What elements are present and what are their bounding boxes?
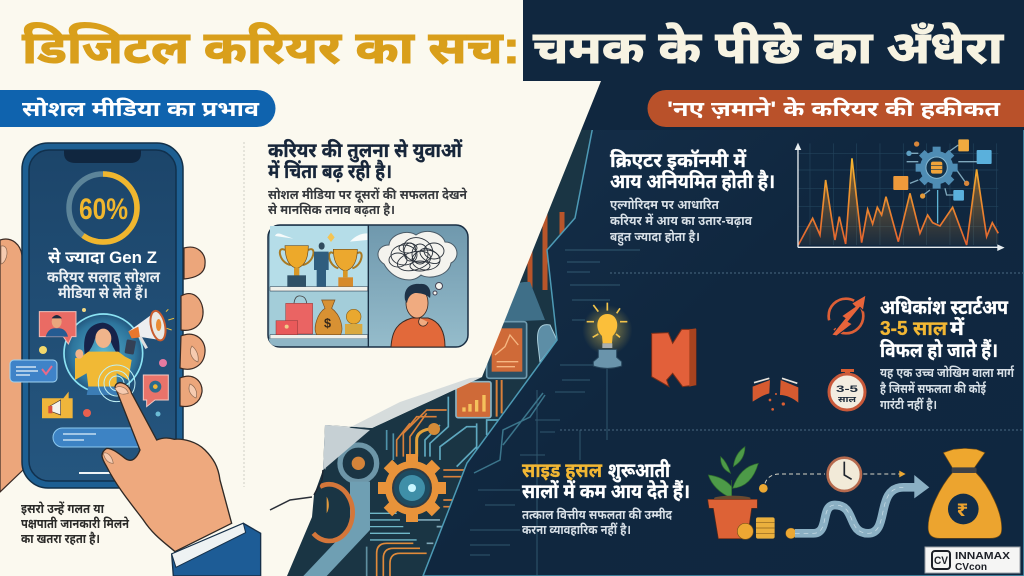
icon: broken orange N block bbox=[652, 328, 696, 387]
circuit: small brass knob bbox=[428, 423, 440, 435]
creator economy heading bbox=[610, 148, 775, 193]
circuit panel revealed behind the torn paper bbox=[280, 80, 610, 576]
icon: sprout in pot with coins bbox=[708, 447, 775, 539]
circuit: central orange gear bbox=[378, 454, 446, 522]
middle body text bbox=[268, 187, 468, 217]
icon: stopwatch with 3-5 years: 3-5 bbox=[836, 384, 858, 394]
icon: broken bridge bbox=[753, 378, 798, 411]
middle body text: सोशल मीडिया पर दूसरों की सफलता देखने bbox=[268, 187, 468, 203]
60% progress ring: 60% bbox=[79, 193, 128, 226]
right hand fingertips bbox=[180, 247, 205, 406]
caption under phone bbox=[21, 501, 130, 546]
creator economy heading: क्रिएटर इकॉनमी में bbox=[610, 148, 747, 172]
title left part: डिजिटल करियर का सच: bbox=[22, 22, 520, 73]
side hustle body text: करना व्यावहारिक नहीं है। bbox=[522, 522, 631, 537]
startups heading: अधिकांश स्टार्टअप bbox=[880, 295, 1009, 319]
startups heading: विफल हो जाते हैं। bbox=[880, 338, 998, 362]
icon: rupee money bag: ₹ bbox=[957, 499, 968, 521]
icon: stopwatch with 3-5 years: साल bbox=[838, 395, 857, 404]
phone bbox=[22, 143, 183, 488]
income volatility line chart bbox=[795, 143, 1005, 251]
pink profile bubble bbox=[39, 312, 76, 344]
logo badge: CV bbox=[934, 555, 949, 567]
section pill: social media impact bbox=[0, 90, 276, 127]
icon: rising broken arrow in circle bbox=[829, 295, 866, 336]
creator economy body text: बहुत ज्यादा होता है। bbox=[610, 229, 700, 246]
60% progress ring bbox=[69, 174, 137, 242]
left hand behind phone bbox=[0, 239, 23, 492]
hearts and sparkles bbox=[39, 308, 167, 417]
megaphone bbox=[128, 309, 174, 348]
side hustle body text bbox=[522, 507, 673, 537]
home indicator bbox=[79, 472, 114, 474]
side hustle heading: सालों में कम आय देते हैं। bbox=[522, 479, 690, 503]
lower input bar bbox=[53, 428, 149, 447]
section pill: new age careers bbox=[648, 90, 1024, 127]
startups body text: गारंटी नहीं है। bbox=[880, 397, 937, 412]
stat text: करियर सलाह सोशल bbox=[47, 269, 161, 286]
icon: light bulb on pedestal bbox=[582, 303, 632, 368]
middle heading: में चिंता बढ़ रही है। bbox=[268, 159, 392, 183]
caption under phone: पक्षपाती जानकारी मिलने bbox=[21, 516, 130, 531]
winding road arrow bbox=[786, 475, 929, 539]
thought cloud with scribbles bbox=[378, 231, 457, 295]
dashed dividers on right panel bbox=[560, 273, 1024, 430]
middle heading bbox=[268, 138, 463, 183]
woman in glowing circle bbox=[64, 314, 143, 395]
ripple rings at touch point bbox=[98, 365, 135, 402]
startups body text: है जिसमें सफलता की कोई bbox=[880, 381, 987, 396]
stat text: से ज्यादा Gen Z bbox=[48, 247, 157, 267]
torn paper fold flap bbox=[270, 377, 482, 510]
stat text bbox=[47, 247, 161, 302]
yellow megaphone bubble bbox=[42, 392, 73, 418]
creator economy body text bbox=[610, 197, 753, 246]
worried person bbox=[391, 284, 445, 347]
caption under phone: इसरो उन्हें गलत या bbox=[21, 501, 105, 516]
gear with data icons bbox=[893, 139, 992, 223]
circuit: tall pipes bbox=[530, 205, 562, 320]
stat text: मीडिया से लेते हैं। bbox=[58, 284, 148, 302]
logo badge: INNAMAX bbox=[955, 550, 1010, 562]
middle body text: से मानसिक तनाव बढ़ता है। bbox=[268, 202, 395, 217]
creator economy heading: आय अनियमित होती है। bbox=[610, 169, 775, 193]
right navy panel bbox=[423, 0, 1024, 576]
startups heading: 3-5 साल bbox=[880, 318, 948, 340]
startups heading bbox=[880, 295, 1009, 362]
icon: rupee money bag bbox=[928, 448, 1002, 538]
creator economy body text: करियर में आय का उतार-चढ़ाव bbox=[610, 213, 753, 228]
side hustle heading: शुरूआती bbox=[608, 458, 671, 483]
startups body text bbox=[880, 365, 1015, 412]
circuit: ring gear left bbox=[303, 445, 377, 576]
caption under phone: का खतरा रहता है। bbox=[21, 531, 100, 546]
logo badge bbox=[925, 547, 1020, 573]
circuit: bar chart monitor bbox=[456, 382, 491, 418]
creator economy body text: एल्गोरिदम पर आधारित bbox=[610, 197, 720, 212]
startups heading: में bbox=[950, 317, 965, 340]
side hustle heading bbox=[522, 458, 690, 503]
dashed column divider bbox=[243, 142, 245, 487]
middle heading: करियर की तुलना से युवाओं bbox=[268, 138, 463, 163]
section pill: social media impact: सोशल मीडिया का प्रभाव bbox=[22, 97, 259, 121]
wealth scene: bags, money bag and coins: $ bbox=[324, 316, 331, 330]
cream paper torn edge bbox=[0, 0, 601, 576]
wealth scene: bags, money bag and coins bbox=[276, 296, 362, 335]
dashed path with clock bbox=[759, 458, 906, 493]
phone notch bbox=[64, 150, 141, 163]
circuit: orange chart monitor bbox=[487, 322, 527, 378]
icon: stopwatch with 3-5 years bbox=[829, 369, 865, 410]
circuit: cylinder and machine body bbox=[498, 282, 545, 322]
circuit: machine head right of monitor bbox=[538, 325, 557, 362]
blue chat bubble overlapping phone edge bbox=[10, 360, 57, 382]
faint code lines on navy panel bbox=[470, 250, 640, 576]
side hustle heading: साइड हसल bbox=[522, 460, 603, 482]
fingernails bbox=[1, 246, 198, 398]
logo badge: CVcon bbox=[955, 562, 987, 573]
section pill: new age careers: 'नए ज़माने' के करियर की हकीकत bbox=[667, 97, 1001, 121]
navy header block behind the title bbox=[523, 0, 1024, 130]
title right part: चमक के पीछे का अँधेरा bbox=[533, 22, 1004, 73]
comparison illustration panel bbox=[268, 225, 468, 347]
success scene: trophies and person bbox=[269, 225, 368, 347]
pointing hand with sleeve bbox=[102, 383, 261, 576]
side hustle body text: तत्काल वित्तीय सफलता की उम्मीद bbox=[522, 507, 673, 522]
small pink bubble with target bbox=[143, 375, 168, 407]
